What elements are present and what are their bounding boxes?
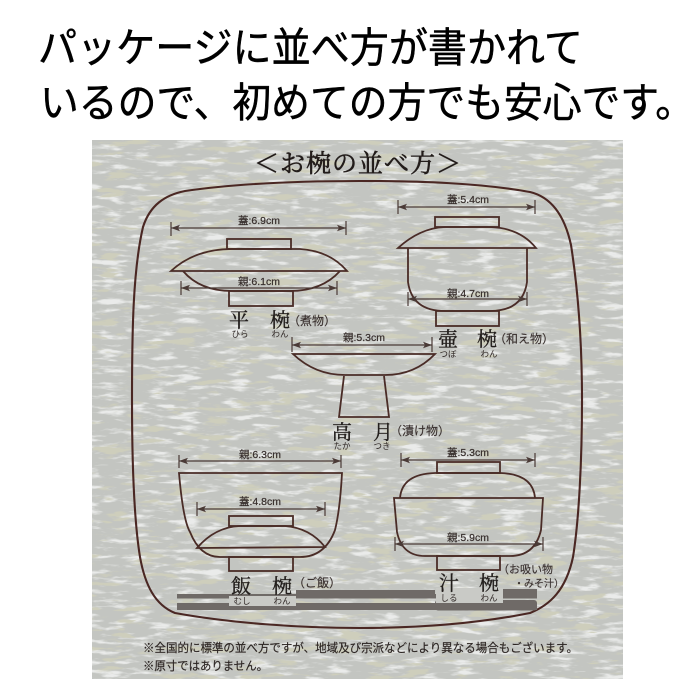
takatsuki name: たか	[333, 441, 351, 451]
shiru-wan name: 汁	[439, 572, 459, 595]
shiru-wan name: わん	[480, 593, 498, 603]
hira-wan name: ひら	[231, 329, 249, 339]
bowl: meshi-wan (rice)	[179, 449, 342, 606]
hira-wan lid dimension	[171, 215, 346, 236]
hira-wan lid and body	[171, 239, 347, 306]
hira-wan body dimension	[181, 276, 337, 295]
takatsuki name: 月	[373, 422, 393, 444]
shiru-wan body dimension	[395, 532, 543, 551]
tsubo-wan name: （和え物）	[494, 332, 554, 346]
meshi-wan name	[229, 575, 341, 606]
chopsticks	[177, 589, 537, 610]
shiru-wan name: （お吸い物	[498, 562, 553, 576]
panel title: ＜お椀の並べ方＞	[254, 150, 461, 178]
tsubo-wan lid dimension: 蓋:5.4cm	[447, 194, 489, 206]
tsubo-wan name: つぼ	[439, 349, 457, 359]
hira-wan lid dimension: 蓋:6.9cm	[238, 215, 280, 227]
panel: marbled paper package photo	[92, 140, 623, 679]
tsubo-wan lid dimension	[398, 194, 535, 214]
bowl: hira-wan (simmered dishes)	[171, 215, 347, 339]
shiru-wan body dimension: 親:5.9cm	[447, 532, 489, 544]
takatsuki name: 高	[332, 421, 352, 444]
tsubo-wan body dimension: 親:4.7cm	[447, 288, 489, 300]
meshi-wan body dimension: 親:6.3cm	[239, 449, 281, 461]
meshi-wan name: わん	[273, 596, 291, 606]
tsubo-wan name	[438, 328, 554, 359]
tsubo-wan name: 椀	[477, 328, 497, 351]
hira-wan name: わん	[271, 329, 289, 339]
shiru-wan lid and body	[394, 462, 543, 570]
tray outline	[132, 181, 582, 628]
takatsuki dimension: 親:5.3cm	[343, 332, 385, 344]
bowl: takatsuki (pickles)	[292, 332, 450, 451]
bowl: shiru-wan (soup)	[394, 447, 564, 603]
takatsuki dish and stem	[293, 354, 435, 417]
meshi-wan lid dimension: 蓋:4.8cm	[239, 496, 281, 508]
meshi-wan name: むし	[233, 596, 251, 606]
hira-wan name: 椀	[270, 309, 290, 332]
meshi-wan name: 飯	[231, 575, 251, 598]
shiru-wan name: しる	[440, 593, 458, 603]
tsubo-wan name: 壷	[438, 328, 458, 351]
shiru-wan name: ・みそ汁）	[514, 577, 564, 590]
hira-wan body dimension: 親:6.1cm	[238, 276, 280, 288]
meshi-wan name: 椀	[272, 575, 292, 598]
hira-wan name: （煮物）	[288, 314, 336, 328]
hira-wan name	[229, 309, 336, 339]
footnotes	[143, 641, 578, 673]
meshi-wan body and lid	[179, 473, 342, 571]
takatsuki name	[332, 421, 450, 451]
meshi-wan body dimension	[179, 449, 341, 468]
hira-wan name: 平	[229, 309, 249, 332]
shiru-wan lid dimension	[401, 447, 535, 467]
bowl: tsubo-wan (dressed dishes)	[398, 194, 554, 359]
heading: two-line Japanese caption	[38, 25, 694, 126]
takatsuki name: （漬け物）	[390, 423, 450, 438]
tsubo-wan lid and body	[398, 217, 536, 326]
tsubo-wan name: わん	[480, 349, 498, 359]
heading: two-line Japanese caption: パッケージに並べ方が書かれて	[38, 25, 583, 71]
meshi-wan lid dimension	[197, 496, 325, 516]
footnotes: ※原寸ではありません。	[143, 659, 268, 673]
takatsuki dimension	[292, 332, 432, 352]
shiru-wan name: 椀	[479, 572, 499, 595]
footnotes: ※全国的に標準の並べ方ですが、地域及び宗派などにより異なる場合もございます。	[143, 641, 578, 655]
shiru-wan lid dimension: 蓋:5.3cm	[447, 447, 489, 459]
tsubo-wan body dimension	[408, 288, 527, 306]
shiru-wan name	[436, 562, 564, 603]
takatsuki name: つき	[373, 441, 391, 451]
meshi-wan name: （ご飯）	[293, 575, 341, 590]
